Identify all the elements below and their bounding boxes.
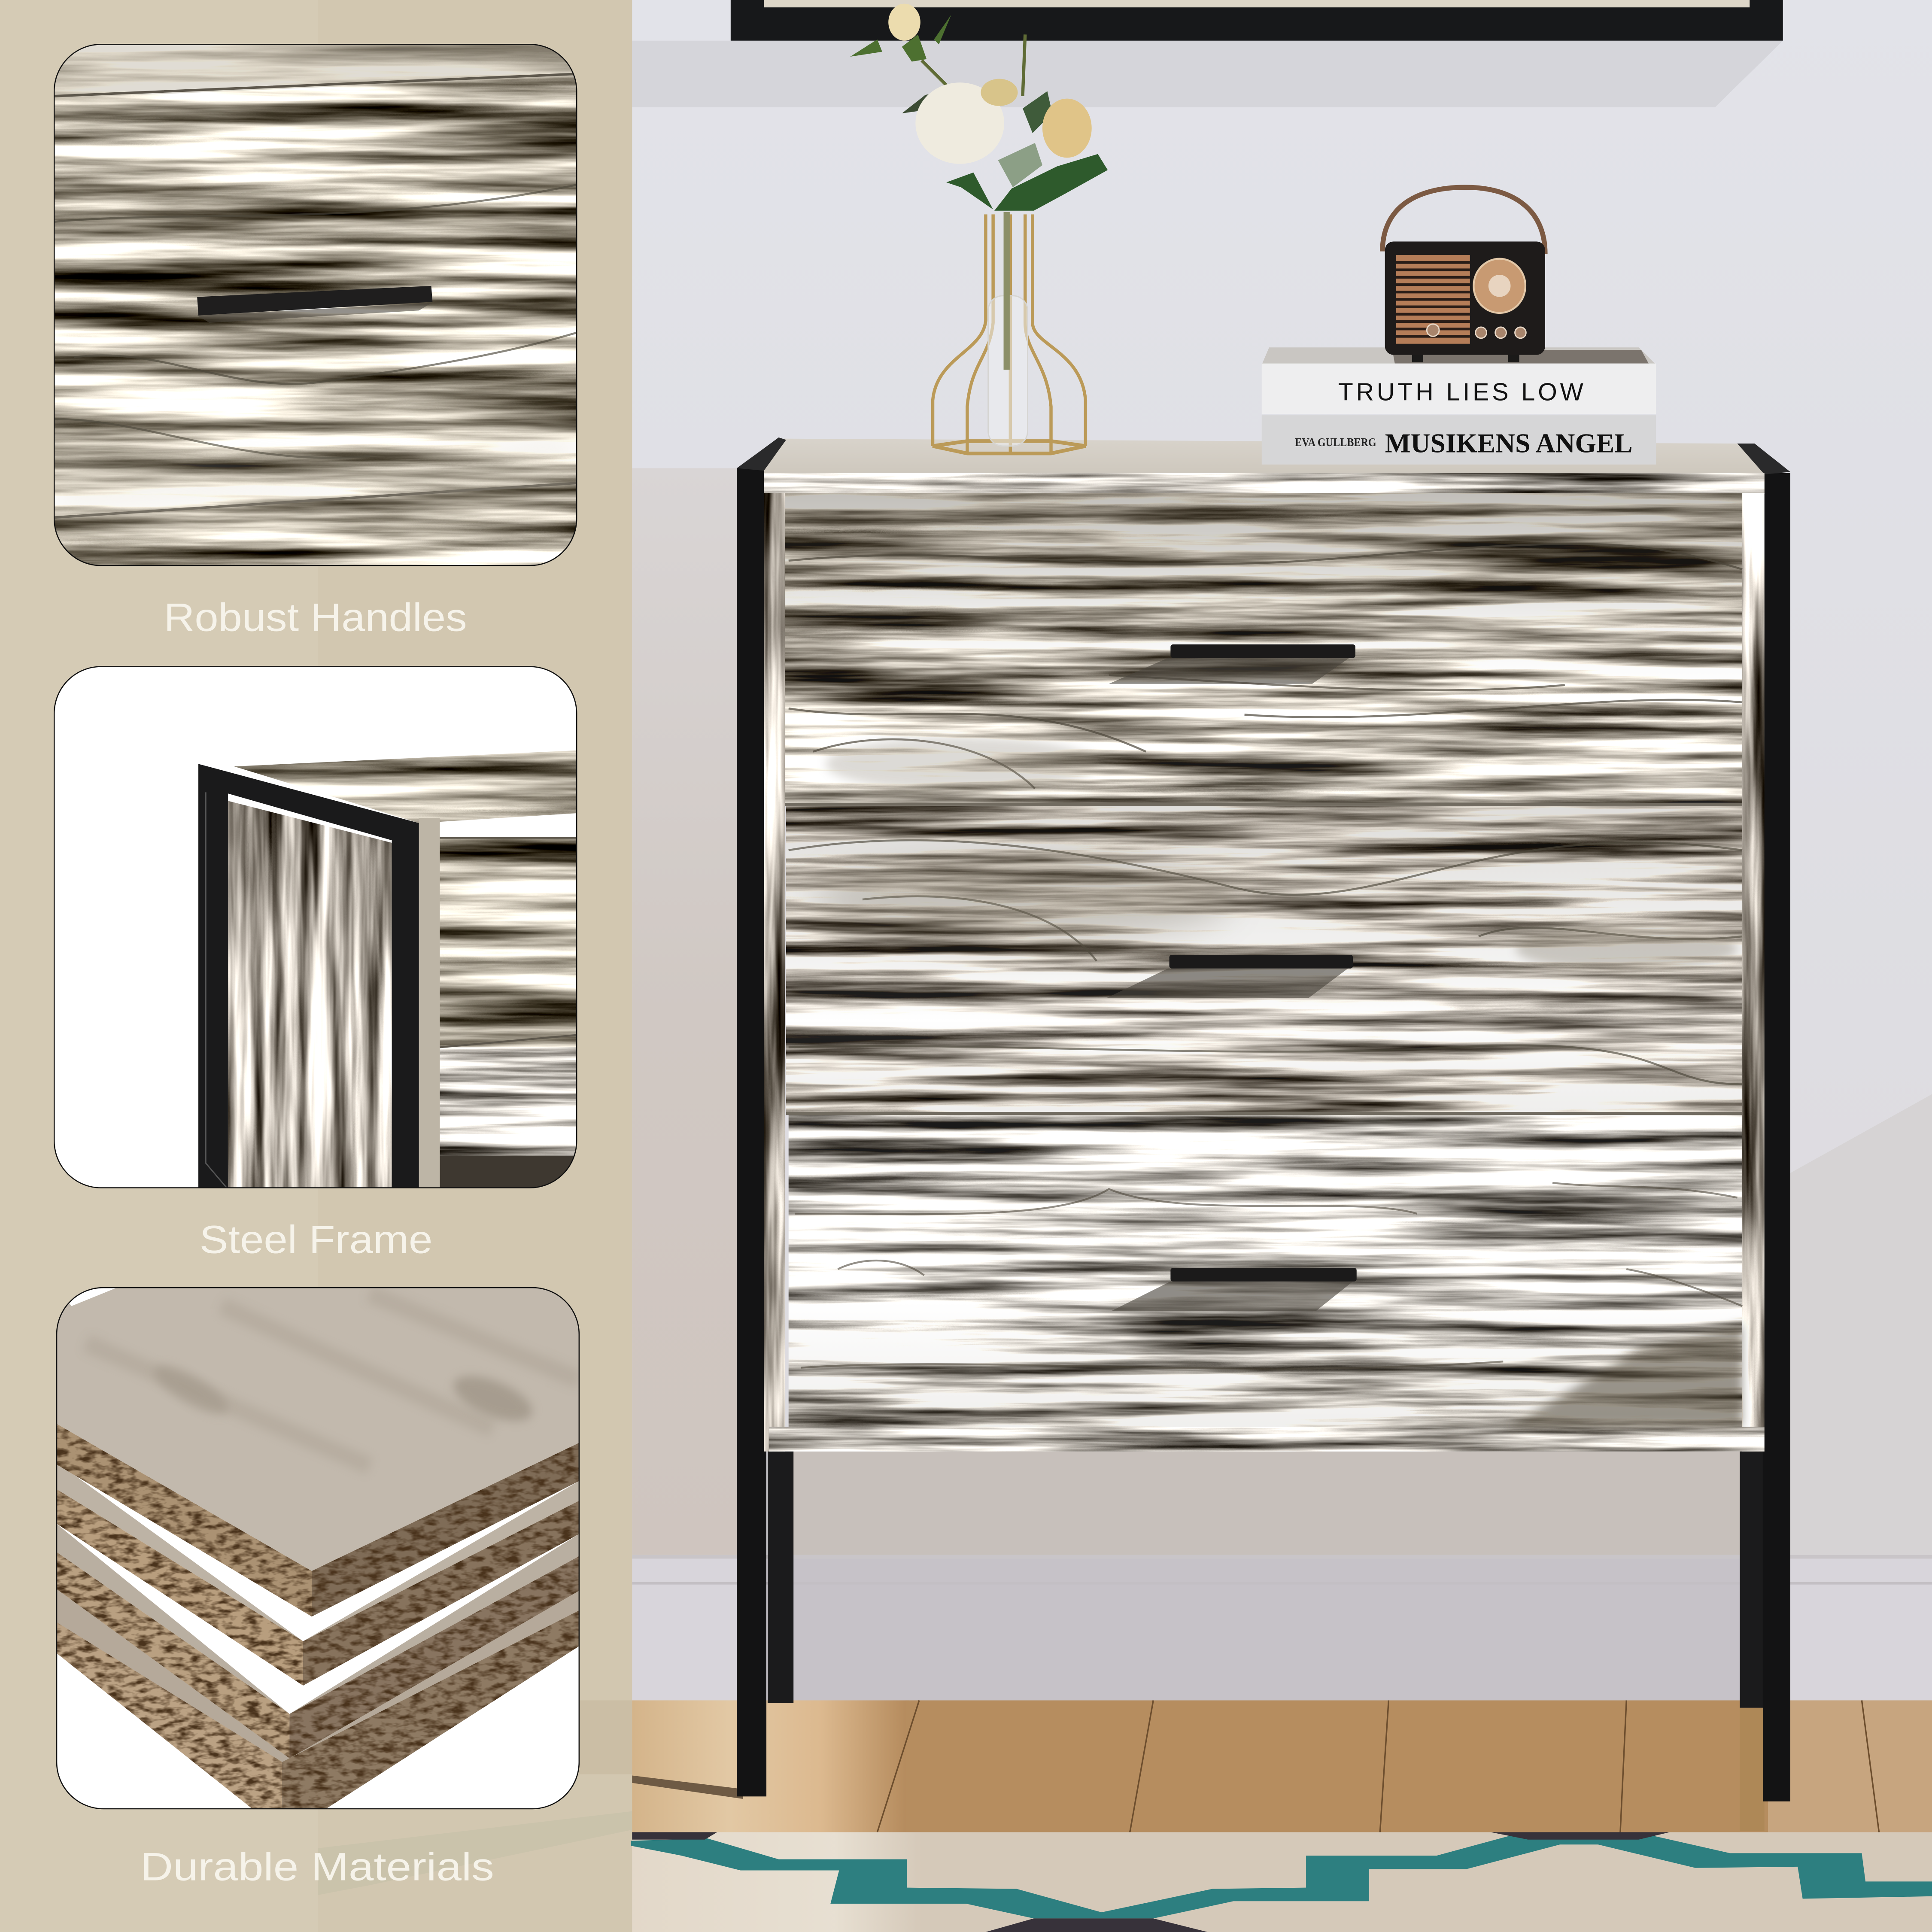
radio handle <box>1382 187 1545 254</box>
handle shadows <box>1106 658 1353 1311</box>
patterned rug <box>631 1832 1932 1932</box>
drawer gaps <box>785 803 1742 1115</box>
white rose <box>915 82 1004 164</box>
knobs <box>1427 324 1526 338</box>
baseboard <box>632 1555 1932 1700</box>
radio feet <box>1412 355 1519 362</box>
rosebud <box>888 4 920 41</box>
top book <box>1262 347 1656 414</box>
handle <box>197 286 432 316</box>
drawer handles <box>1170 644 1357 1282</box>
side wood panel <box>228 801 392 1188</box>
bottom book: EVA GULLBERG <box>1295 436 1376 449</box>
small yellow flower <box>981 79 1018 106</box>
rug teal zigzag <box>631 1836 1932 1918</box>
black steel frame <box>198 764 419 1188</box>
room photo: wall <box>632 0 1932 1555</box>
particle board texture <box>55 1423 579 1810</box>
panel: durable materials close-up <box>55 1288 579 1810</box>
retro radio <box>1382 187 1545 362</box>
drawer 2 <box>786 806 1742 1113</box>
dresser <box>737 437 1790 1801</box>
top board <box>234 750 577 823</box>
label: robust handles: Robust Handles <box>164 595 467 639</box>
speaker grille <box>1396 255 1470 344</box>
board 2 <box>55 1461 579 1686</box>
gold wire vase <box>933 212 1085 453</box>
handle shadow <box>197 303 431 323</box>
board 3 <box>55 1523 579 1758</box>
wooden floor <box>632 1700 1932 1833</box>
lower shelf <box>440 1047 577 1158</box>
label: durable materials: Durable Materials <box>140 1845 494 1889</box>
drawer front <box>440 838 577 1047</box>
bottom book: MUSIKENS ANGEL <box>1385 428 1633 458</box>
flower bouquet <box>850 4 1108 211</box>
radio body <box>1385 241 1545 355</box>
dial <box>1473 259 1525 313</box>
label: steel frame: Steel Frame <box>200 1218 432 1262</box>
drawer 1 <box>785 493 1742 803</box>
back legs <box>768 1442 1763 1708</box>
board 4 <box>55 1588 579 1810</box>
panel: steel frame close-up <box>54 667 577 1188</box>
stems and herb <box>922 34 1025 96</box>
top board surface <box>55 1288 579 1571</box>
drawer 3 <box>789 1115 1742 1427</box>
top book: TRUTH LIES LOW <box>1338 379 1583 406</box>
left sidebar background <box>0 0 632 1932</box>
panel: robust handles close-up <box>54 44 577 565</box>
dresser top <box>737 437 1790 494</box>
wood texture <box>54 44 577 565</box>
stacked books <box>1262 347 1656 465</box>
yellow peony <box>1042 99 1092 158</box>
front strip <box>419 818 440 1188</box>
leaves <box>850 15 1108 211</box>
top board edges <box>55 1423 312 1616</box>
cabinet sides <box>764 493 1765 1452</box>
rug dark diamonds <box>632 1832 1670 1932</box>
wall picture frame <box>731 0 1783 41</box>
bottom book <box>1262 415 1656 465</box>
front legs <box>737 468 1790 1801</box>
